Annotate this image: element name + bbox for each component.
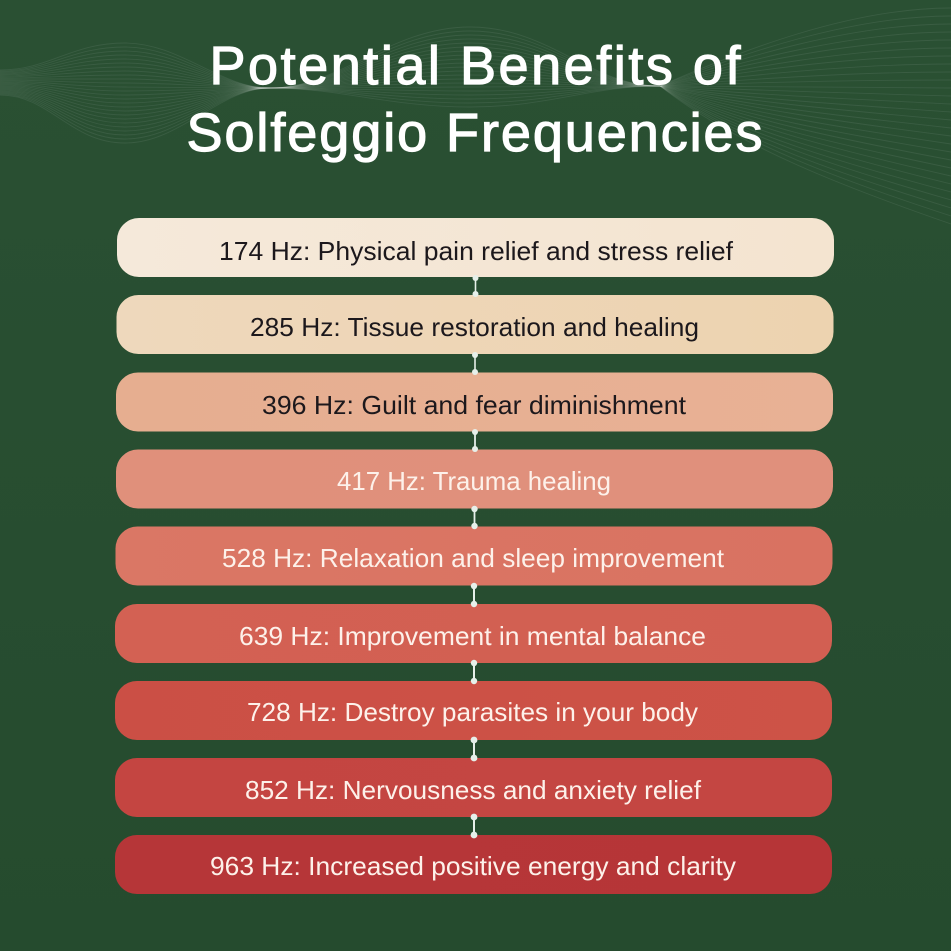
row: 417 Hz: 417 Hz: Trauma healing xyxy=(337,466,611,496)
row: 852 Hz: 852 Hz: Nervousness and anxiety relief xyxy=(245,775,702,805)
row: 528 Hz: 528 Hz: Relaxation and sleep improvement xyxy=(222,543,725,573)
row: 963 Hz xyxy=(115,835,832,894)
row: 285 Hz: 285 Hz: Tissue restoration and healing xyxy=(250,312,699,342)
row: 174 Hz: 174 Hz: Physical pain relief and stress relief xyxy=(219,236,734,266)
row: 528 Hz xyxy=(116,526,832,586)
background sound wave lines xyxy=(0,8,951,224)
title line 1: Potential Benefits of xyxy=(210,36,741,96)
connectors between rows xyxy=(471,275,478,838)
row: 963 Hz: 963 Hz: Increased positive energy and clarity xyxy=(210,851,736,881)
row: 285 Hz xyxy=(116,295,834,354)
row: 417 Hz xyxy=(116,450,833,508)
row: 174 Hz xyxy=(117,218,834,277)
row: 852 Hz xyxy=(115,758,832,817)
row: 639 Hz xyxy=(115,604,832,663)
row: 639 Hz: 639 Hz: Improvement in mental balance xyxy=(239,621,706,651)
row: 396 Hz: 396 Hz: Guilt and fear diminishment xyxy=(262,390,687,420)
title xyxy=(186,36,762,163)
frequency list xyxy=(115,218,834,894)
title line 2: Solfeggio Frequencies xyxy=(186,103,762,163)
row: 396 Hz xyxy=(116,372,833,432)
row: 728 Hz xyxy=(115,681,832,740)
row: 728 Hz: 728 Hz: Destroy parasites in your body xyxy=(247,697,698,727)
